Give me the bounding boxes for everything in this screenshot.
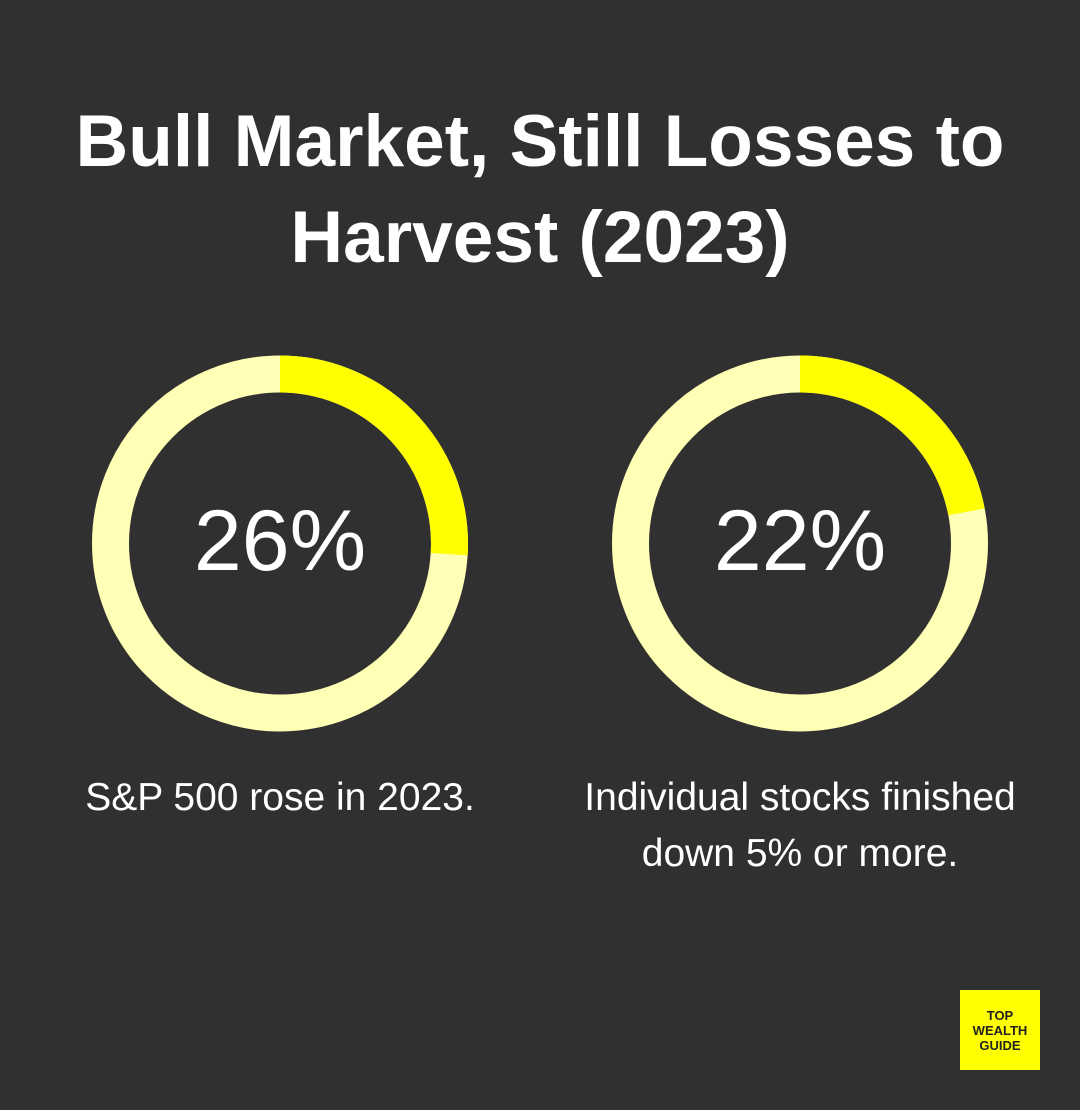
caption: right: down 5% or more. bbox=[642, 832, 958, 875]
logo: TOP bbox=[987, 1008, 1013, 1022]
logo: GUIDE bbox=[979, 1038, 1021, 1052]
donut: individual stocks: 22% bbox=[714, 493, 886, 589]
caption: right bbox=[584, 776, 1016, 875]
caption: right: Individual stocks finished bbox=[584, 776, 1016, 819]
donut: S&P 500 bbox=[110, 374, 450, 713]
logo bbox=[960, 990, 1040, 1070]
donut: S&P 500: 26% bbox=[194, 493, 366, 589]
title bbox=[76, 101, 1004, 278]
donut: individual stocks bbox=[630, 374, 970, 713]
logo: WEALTH bbox=[973, 1022, 1027, 1038]
title: Harvest (2023) bbox=[290, 197, 790, 278]
caption: left: S&P 500 rose in 2023. bbox=[85, 776, 475, 819]
title: Bull Market, Still Losses to bbox=[76, 101, 1004, 182]
